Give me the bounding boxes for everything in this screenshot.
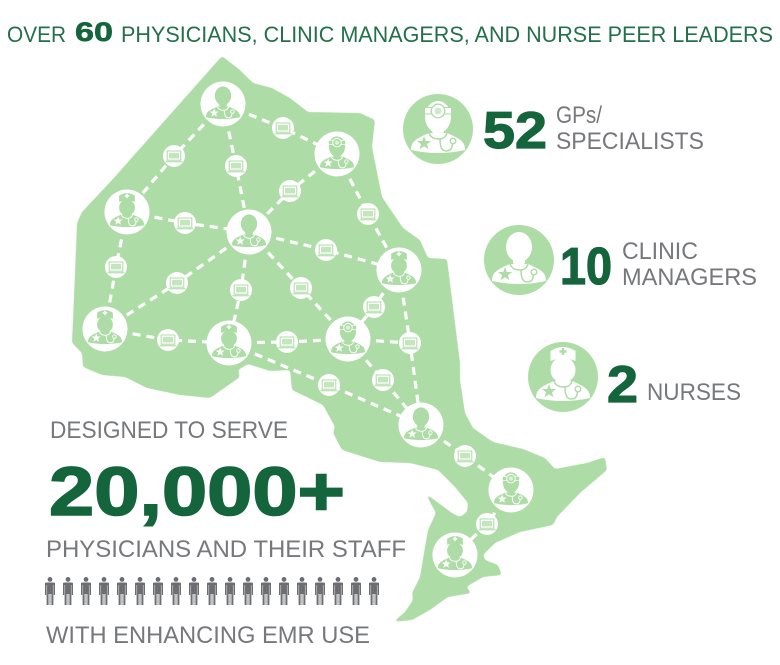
number: 52: 52 (483, 102, 547, 160)
big number: 20,000+: 20,000+ (49, 453, 345, 530)
number: 10: 10 (560, 238, 612, 296)
title: 60 (75, 17, 113, 47)
stat: GPs and specialists (403, 94, 704, 164)
stat: nurses (528, 342, 741, 414)
label: GPs / specialists (556, 102, 704, 155)
number: 2: 2 (607, 356, 638, 414)
label: clinic managers (622, 238, 757, 291)
label: clinic managers: MANAGERS (622, 264, 757, 291)
physician nodes (82, 82, 534, 578)
label: nurses: NURSES (647, 379, 741, 406)
title: OVER (7, 22, 66, 47)
stat: clinic managers (484, 225, 757, 296)
icon row: people (45, 577, 379, 605)
title: PHYSICIANS, CLINIC MANAGERS, AND NURSE PEER LEADERS (121, 22, 773, 47)
map of Ontario with peer leader network (72, 56, 607, 622)
laptop nodes (105, 117, 498, 535)
network links (105, 104, 511, 555)
text: with enhancing EMR use: WITH ENHANCING EMR USE (46, 622, 370, 649)
icon: clinic manager (484, 225, 554, 295)
label: GPs / specialists: SPECIALISTS (556, 128, 704, 155)
text: physicians and their staff: PHYSICIANS AND THEIR STAFF (46, 536, 406, 563)
text: designed to serve: DESIGNED TO SERVE (50, 417, 288, 444)
icon: nurse (528, 342, 598, 412)
label: GPs / specialists: GPs/ (556, 102, 602, 129)
map shape (72, 56, 607, 622)
icon: specialist (403, 94, 473, 164)
label: clinic managers: CLINIC (622, 238, 698, 265)
